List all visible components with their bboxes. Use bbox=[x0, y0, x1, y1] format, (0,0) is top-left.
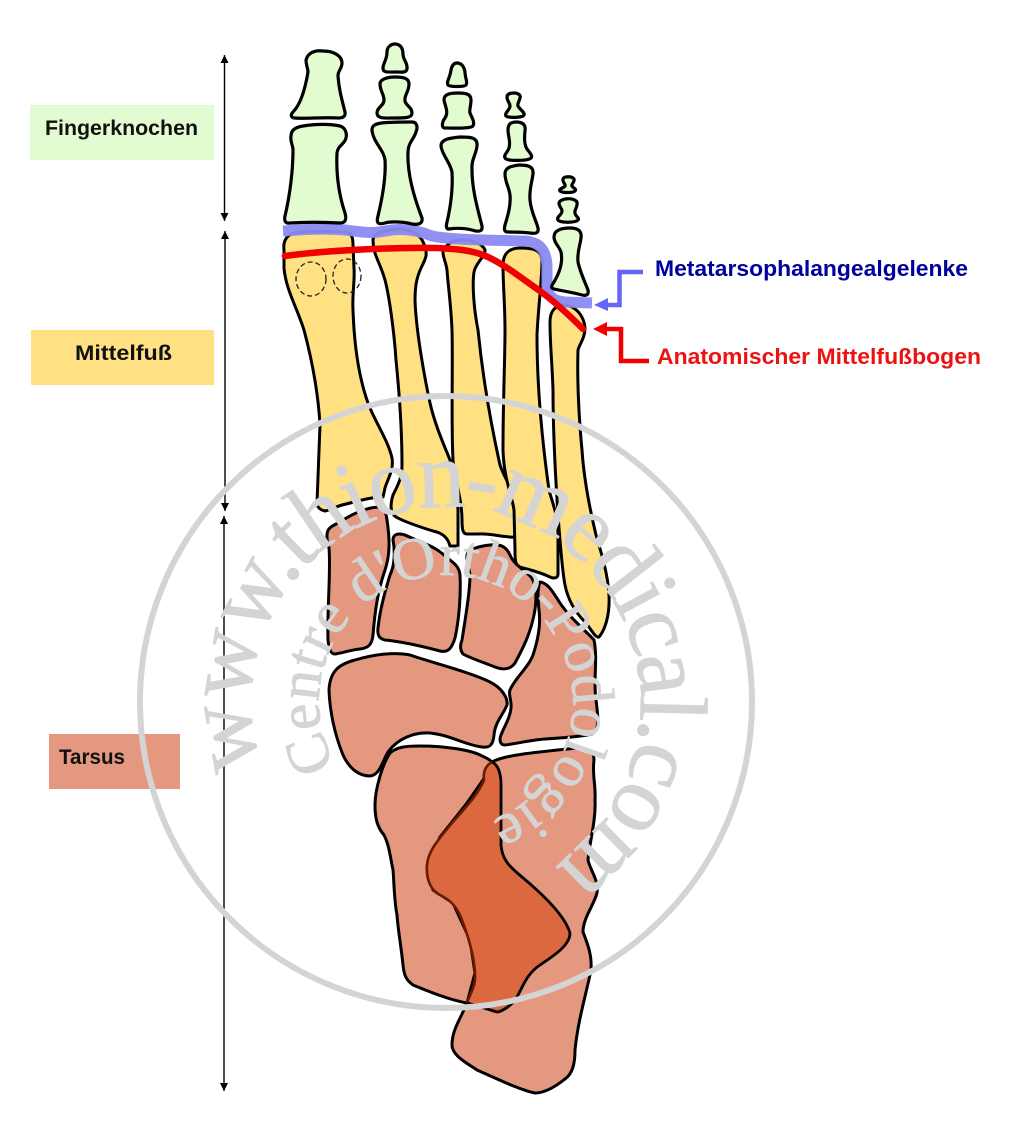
label: Metatarsophalangealgelenke: Metatarsophalangealgelenke bbox=[655, 256, 968, 281]
label: Fingerknochen bbox=[30, 105, 214, 160]
watermark: Centre d'Ortho-Podologie bbox=[286, 538, 616, 843]
label: Tarsus: Tarsus bbox=[59, 746, 125, 769]
range arrow: tarsus bbox=[223, 516, 225, 1091]
label: Fingerknochen: Fingerknochen bbox=[45, 117, 198, 140]
phalanges bbox=[285, 44, 588, 295]
tarsal bones bbox=[327, 507, 598, 1093]
label: Anatomischer Mittelfußbogen: Anatomischer Mittelfußbogen bbox=[657, 344, 981, 369]
anatomical metatarsal arch (red) bbox=[285, 248, 583, 329]
metatarsal bones bbox=[284, 229, 609, 637]
metatarsophalangeal joint line (blue) bbox=[283, 229, 592, 303]
range arrow: metatarsus bbox=[224, 231, 226, 511]
watermark: www.thion-medical.com bbox=[204, 461, 708, 892]
label: Mittelfuß bbox=[31, 330, 214, 385]
talus–calcaneus overlap bbox=[427, 762, 570, 1012]
sesamoid bones (dashed circles) bbox=[296, 259, 361, 296]
range arrow: phalanges bbox=[224, 55, 226, 221]
label: Tarsus bbox=[49, 734, 180, 789]
arrow: red callout bbox=[593, 322, 649, 361]
arrow: blue callout bbox=[594, 272, 643, 311]
label: Mittelfuß: Mittelfuß bbox=[75, 342, 172, 365]
